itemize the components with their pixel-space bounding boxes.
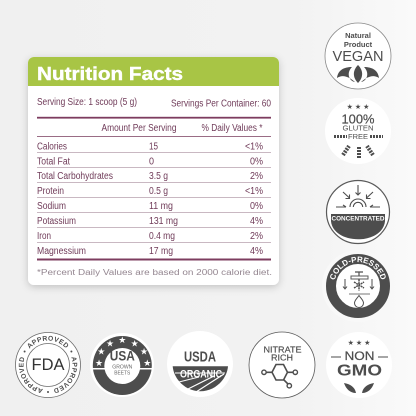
table: nutrition rows: <1%: [245, 186, 263, 197]
badge: USA grown beets: ★: [131, 338, 139, 348]
heading: nutrition facts: Nutrition Facts: [37, 64, 183, 84]
badge: non GMO: ★ ★ ★: [348, 339, 370, 347]
table: nutrition rows: 2%: [250, 171, 263, 182]
table: nutrition rows: 15: [149, 142, 158, 152]
badge: USA grown beets: ★: [143, 358, 151, 368]
badge: 100% gluten free: FREE: [348, 132, 368, 141]
badge: USA grown beets: ★: [140, 346, 148, 356]
badge: 100% gluten free: ★ ★ ★: [347, 103, 369, 111]
table: nutrition rows: 131 mg: [149, 216, 178, 227]
badge: USA grown beets: ★: [95, 358, 103, 368]
badge: FDA approved: [15, 332, 81, 398]
badge: 100% gluten free: GLUTEN: [342, 126, 374, 133]
badge: concentrated: CONCENTRATED: [332, 216, 385, 222]
table: nutrition rows: 11 mg: [149, 201, 173, 212]
badge: USA grown beets: GROWN: [112, 365, 132, 371]
table: nutrition rows: 4%: [250, 216, 263, 227]
badge: nitrate rich: NITRATE: [264, 345, 302, 354]
badge: nitrate rich: RICH: [271, 354, 293, 363]
table: nutrition rows: Magnessium: [37, 246, 86, 257]
badge: natural product vegan: Product: [344, 40, 373, 49]
table: nutrition rows: 0%: [250, 156, 263, 168]
badge: USA grown beets: ★: [106, 338, 114, 348]
badge: USA grown beets: BEETS: [114, 370, 131, 376]
table: nutrition rows: 4%: [250, 246, 263, 257]
heading: nutrition facts: [28, 57, 279, 86]
badge: non GMO: GMO: [337, 362, 382, 380]
badge: cold-pressed: [326, 254, 390, 318]
table: nutrition rows: 0.4 mg: [149, 231, 175, 242]
table: nutrition rows: [37, 117, 271, 260]
footnote: *Percent Daily Values are based on 2000 calorie diet.: [37, 268, 272, 277]
table: nutrition rows: Iron: [37, 231, 51, 242]
text: serving info: [37, 97, 271, 110]
badge: nitrate rich: [249, 332, 315, 398]
table: nutrition rows: Total Fat: [37, 156, 70, 168]
panel: nutrition facts card: [28, 57, 279, 285]
badge: FDA approved: APPROVED: [54, 357, 78, 393]
badge: natural product vegan: [325, 23, 391, 89]
badge: natural product vegan: Natural: [345, 31, 371, 40]
badge: USA grown beets: USA: [110, 348, 135, 364]
table: nutrition rows: 0.5 g: [149, 186, 168, 197]
badge: USDA organic: [167, 331, 233, 397]
table: nutrition rows: 0%: [250, 201, 263, 212]
badge: non GMO: [326, 332, 392, 398]
badge: USA grown beets: [90, 333, 154, 397]
table: nutrition rows: Protein: [37, 186, 64, 197]
badge: 100% gluten free: 100%: [342, 112, 374, 126]
text: serving info: Servings Per Container: 60: [171, 98, 271, 110]
badge: USA grown beets: ★: [118, 335, 126, 345]
badge: FDA approved: APPROVED: [18, 357, 43, 393]
badge: concentrated: [326, 180, 390, 244]
badge: FDA approved: FDA: [32, 355, 65, 374]
badge: USDA organic: USDA: [184, 348, 216, 365]
badge: non GMO: NON: [344, 351, 374, 363]
badge: FDA approved: APPROVED: [28, 336, 68, 349]
badge: USA grown beets: ★: [97, 346, 105, 356]
table: nutrition rows: Potassium: [37, 216, 76, 227]
badge: USDA organic: ORGANIC: [180, 368, 222, 380]
badge: 100% gluten free: [325, 98, 391, 164]
table: nutrition rows: 2%: [250, 231, 263, 242]
table: nutrition rows: Amount Per Serving: [102, 123, 176, 134]
table: nutrition rows: Calories: [37, 142, 67, 152]
table: nutrition rows: 17 mg: [149, 246, 173, 257]
table: nutrition rows: Sodium: [37, 201, 66, 212]
table: nutrition rows: Total Carbohydrates: [37, 171, 113, 182]
table: nutrition rows: 3.5 g: [149, 171, 168, 182]
badge: natural product vegan: VEGAN: [332, 48, 384, 65]
table: nutrition rows: <1%: [245, 142, 263, 152]
table: nutrition rows: % Daily Values *: [202, 123, 263, 134]
badge: cold-pressed: COLD-PRESSED: [330, 256, 386, 280]
text: serving info: Serving Size: 1 scoop (5 g): [37, 97, 137, 108]
table: nutrition rows: 0: [149, 156, 154, 168]
